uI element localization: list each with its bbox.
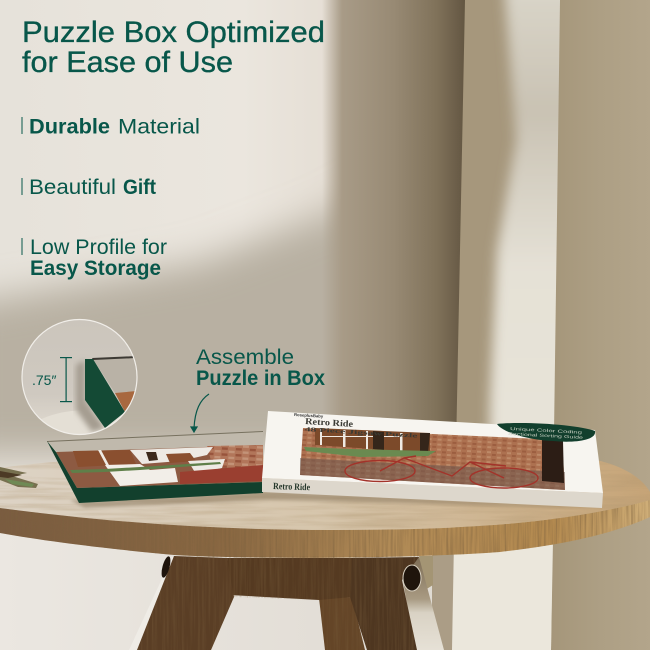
box inner wall (47, 431, 263, 452)
lid badge: Sectional Sorting Guide (508, 431, 584, 440)
box contents: puzzle (56, 445, 263, 488)
feature: low profile: Easy Storage (30, 257, 161, 280)
height label: .75″ (32, 372, 56, 388)
lid logo: RoseplusBaby (294, 412, 324, 419)
puzzle piece on table (0, 467, 38, 488)
feature: beautiful gift: Beautiful (29, 176, 116, 199)
bicycle (345, 456, 538, 488)
callout: assemble puzzle in box: Puzzle in Box (196, 367, 325, 390)
feature: durable material (22, 116, 200, 138)
lid title (304, 416, 419, 440)
table top (0, 456, 650, 558)
feature: low profile: Low Profile for (30, 236, 167, 259)
feature: low profile (22, 236, 167, 280)
callout: assemble puzzle in box (196, 346, 325, 390)
title: for Ease of Use (22, 46, 233, 79)
box front side (47, 441, 263, 503)
arrow: to box (191, 394, 209, 432)
background: shaded wall column (322, 0, 465, 480)
lid badge (497, 423, 595, 442)
feature: durable material: Material (118, 116, 200, 138)
lid spine label: Retro Ride (273, 482, 310, 493)
feature: durable material: Durable (29, 116, 110, 138)
height dimension (60, 357, 72, 402)
background: curtain (452, 0, 650, 650)
detail circle: box height (21, 318, 138, 436)
callout: assemble puzzle in box: Assemble (196, 346, 294, 369)
open puzzle box (47, 431, 263, 503)
title: Puzzle Box Optimized (22, 16, 325, 49)
lid badge: Unique Color Coding (510, 426, 583, 435)
table legs (129, 555, 444, 650)
lid image (300, 428, 565, 490)
lid title: 48 Piece Jigsaw Puzzle (304, 427, 418, 440)
title (22, 16, 325, 79)
feature: beautiful gift: Gift (123, 176, 156, 199)
background: wall (0, 186, 339, 468)
puzzle lid (262, 411, 603, 508)
box shadow on table (70, 490, 605, 508)
lid title: Retro Ride (305, 416, 353, 429)
background: wall below table (0, 525, 553, 650)
feature: beautiful gift (22, 176, 156, 199)
